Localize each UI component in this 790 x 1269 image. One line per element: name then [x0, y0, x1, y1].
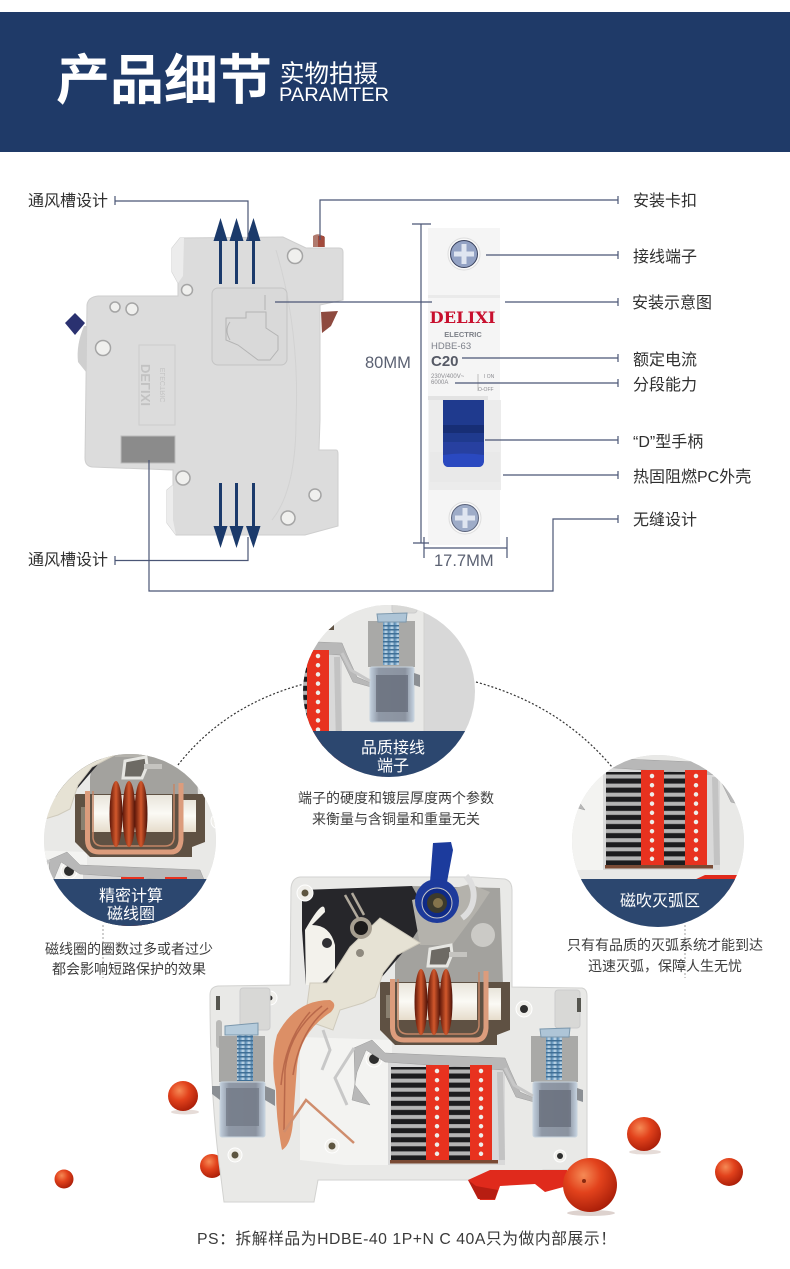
- install diagram panel: [212, 288, 287, 365]
- screw holes: [96, 248, 321, 525]
- footnote: PS：拆解样品为HDBE-40 1P+N C 40A只为做内部展示！: [197, 1230, 616, 1248]
- band label: 磁吹灭弧区: [620, 892, 700, 910]
- front view of breaker: C20: [431, 353, 459, 370]
- circle: terminal: [303, 605, 475, 777]
- side view of breaker: [65, 234, 343, 535]
- circle: coil: [44, 754, 216, 926]
- ventilation arrows up: [214, 218, 260, 284]
- top knob: [313, 234, 325, 247]
- brand: DELIXI: [430, 308, 496, 327]
- dotted connector arcs: [103, 682, 685, 978]
- red ball behind breaker: [200, 1154, 224, 1178]
- caption: terminal: 来衡量与含铜量和重量无关: [312, 811, 480, 827]
- bottom screw: [449, 502, 481, 534]
- side view of breaker: DELIXI: [138, 364, 153, 406]
- caption: coil: 磁线圈的圈数过多或者过少: [45, 941, 213, 957]
- callout labels right: 安装示意图: [632, 293, 712, 312]
- molded logo box: [139, 345, 175, 425]
- blue handle: [443, 400, 484, 467]
- title: 产品细节: [56, 51, 272, 111]
- din clip: [321, 311, 338, 333]
- dimension label 17.7mm: 17.7MM: [434, 552, 494, 570]
- callout labels left: [28, 192, 108, 569]
- dimension label 80mm: 80MM: [365, 354, 411, 372]
- callout labels left: 通风槽设计: [28, 551, 108, 569]
- callout labels right: 安装卡扣: [633, 192, 697, 210]
- caption: coil: 都会影响短路保护的效果: [52, 961, 206, 977]
- front view of breaker: ELECTRIC: [444, 330, 482, 339]
- top screw: [448, 238, 480, 270]
- callout labels left: 通风槽设计: [28, 192, 108, 210]
- caption: arc chute: 只有有品质的灭弧系统才能到达: [567, 937, 763, 953]
- band label: 精密计算: [99, 886, 163, 905]
- red balls: [54, 1081, 743, 1216]
- callout labels right: [632, 192, 751, 529]
- caption: coil: [45, 941, 213, 977]
- callout labels right: 分段能力: [633, 376, 697, 394]
- side view of breaker: ELECTRIC: [160, 368, 167, 402]
- header banner: [0, 12, 790, 152]
- band label: 品质接线: [361, 739, 425, 757]
- callout labels right: “D”型手柄: [633, 433, 703, 451]
- opened breaker: [210, 842, 587, 1202]
- subtitle chinese: 实物拍摄: [280, 60, 378, 88]
- handle: [65, 313, 85, 335]
- grey label: [121, 436, 175, 463]
- caption: terminal: [298, 790, 494, 827]
- front view of breaker: 230V/400V~: [431, 374, 465, 380]
- caption: terminal: 端子的硬度和镀层厚度两个参数: [298, 790, 494, 806]
- circle: terminal: 端子: [377, 757, 409, 775]
- dimension 17.7mm: [424, 537, 507, 558]
- dimension 80mm: [412, 224, 431, 543]
- front view of breaker: I ON: [484, 374, 495, 380]
- caption: arc chute: 迅速灭弧，保障人生无忧: [588, 958, 742, 974]
- caption: arc chute: [567, 937, 763, 974]
- front view of breaker: [428, 228, 501, 545]
- front view of breaker: 6000A: [431, 380, 448, 386]
- callout leader lines: [115, 196, 618, 591]
- circle: arc chute: [572, 755, 744, 927]
- circle: coil: 磁线圈: [107, 905, 155, 923]
- front view of breaker: O-OFF: [478, 387, 494, 393]
- callout labels right: 热固阻燃PC外壳: [633, 468, 751, 486]
- switch slot: [428, 396, 488, 400]
- callout labels right: 额定电流: [633, 351, 697, 369]
- subtitle english: PARAMTER: [279, 85, 389, 106]
- callout labels right: 无缝设计: [633, 511, 697, 529]
- callout labels right: 接线端子: [633, 248, 697, 266]
- ventilation arrows down: [214, 483, 260, 548]
- front view of breaker: HDBE-63: [431, 341, 471, 352]
